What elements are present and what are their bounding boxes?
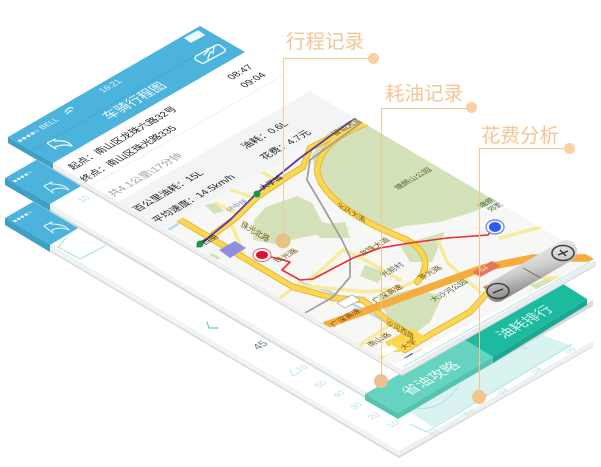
stats panel: 百公里油耗：15L [129, 168, 207, 214]
screen layer 2: speed chart [5, 67, 593, 429]
blue header of layer 3 [5, 192, 95, 245]
stats panel [118, 91, 355, 229]
road and place names: 珠光北路 [239, 219, 272, 244]
callout: fuel records: 耗油记录 [385, 83, 463, 105]
road and place names: 留仙大道 [328, 116, 364, 137]
y axis labels: 40 [330, 389, 347, 399]
back arrow layer 3 [44, 222, 69, 233]
callout: cost analysis [472, 125, 575, 404]
road and place names: 南山路 [364, 331, 393, 348]
header bar [8, 26, 245, 169]
map: 郊野公园 [484, 192, 520, 213]
map: 大沙河公园 [427, 278, 470, 303]
road and place names: 西丽 [199, 233, 221, 246]
road and place names [199, 116, 444, 351]
y axis labels: 20 [365, 411, 382, 421]
callout: cost analysis: 花费分析 [481, 125, 559, 147]
blue header of layer 2 [5, 152, 95, 204]
x axis labels [427, 346, 579, 437]
sheet base [8, 137, 596, 376]
end marker [486, 220, 504, 234]
X356 tag [337, 295, 360, 308]
back arrow icon [47, 139, 72, 149]
tab bar [365, 282, 587, 419]
route [263, 230, 492, 280]
x axis labels: 04 [529, 366, 545, 375]
screen layer 1: trip map [8, 26, 596, 376]
road and place names: 龙珠大道 [356, 236, 392, 257]
trip addresses: 09:04 [238, 71, 270, 90]
y axis labels: 10 [384, 419, 401, 429]
status: time: 16:21 [96, 78, 124, 94]
interchange [385, 328, 425, 352]
tab: fuel saving tips: 省油攻略 [398, 359, 464, 398]
stats panel: 花费：4.7元 [256, 128, 314, 162]
screen layer 3: fuel chart [5, 107, 593, 458]
tab: fuel ranking: 油耗排行 [493, 303, 558, 341]
stats panel: 平均速度：14.5km/h [148, 172, 238, 225]
railway [305, 122, 362, 313]
callout: fuel records [374, 83, 477, 388]
zoom control [487, 246, 574, 298]
x axis labels: 01 [427, 428, 443, 437]
chevron [207, 322, 218, 328]
trip summary: 共4.1公里\17分钟 [104, 151, 186, 199]
trip addresses: 08:47 [225, 63, 257, 82]
battery icon [185, 31, 204, 42]
dots layer 3: ●●●●○ [11, 210, 35, 224]
share icon [195, 45, 225, 63]
trip addresses: 终点：南山区珠光路335 [76, 123, 180, 184]
map logo [396, 349, 422, 363]
road and place names: 环中线 [224, 198, 250, 213]
scale bar [378, 345, 398, 356]
map [165, 116, 594, 366]
dial value: 45 [250, 339, 271, 352]
main yellow roads [177, 123, 490, 350]
y axis labels: 30 [347, 401, 364, 411]
y axis labels: 50 [312, 379, 329, 389]
trip addresses: 起点：南山区龙珠六路32号 [64, 104, 180, 172]
map: 塘朗山公园 [391, 166, 434, 191]
road and place names: 大学 [397, 338, 420, 351]
y axis labels [293, 363, 401, 429]
trip addresses [64, 63, 270, 184]
dots layer 2: ●●●●○ [11, 170, 35, 184]
map: G4 [479, 266, 491, 273]
road and place names: 大学城 [256, 174, 285, 191]
tab: fuel ranking [462, 282, 587, 363]
stats panel: 油耗：0.6L [237, 119, 292, 151]
callout: trip records [276, 31, 379, 248]
road and place names: 茶光路 [415, 264, 444, 281]
highway [326, 258, 592, 325]
map: 光前村 [377, 261, 406, 278]
road and place names: 珠光路 [271, 247, 300, 264]
start marker [253, 248, 271, 262]
x axis labels: 02 [461, 408, 477, 417]
callout: trip records: 行程记录 [286, 31, 364, 53]
status: carrier: ●●●●○ BELL [14, 116, 62, 144]
x axis labels: 05 [563, 346, 579, 355]
road and place names: 北环大道 [337, 199, 366, 225]
parks [203, 116, 560, 335]
river [165, 224, 392, 325]
minor roads [216, 172, 557, 362]
title: 车骑行程图 [98, 80, 170, 122]
road and place names: 广深高速 [327, 307, 363, 328]
y axis labels: 10 [293, 363, 310, 373]
G4 tag [472, 261, 501, 277]
status: wifi icon [65, 108, 73, 114]
teal value: 10 [75, 194, 92, 204]
x axis labels: 03 [495, 387, 511, 396]
road and place names: 广深高速 [369, 283, 405, 304]
purple block [219, 241, 246, 258]
chart area [410, 331, 572, 427]
map: 塘朗山 [475, 192, 504, 209]
road and place names: 沙河西路 [386, 316, 415, 342]
tab: fuel saving tips [365, 338, 493, 419]
rounded outline card [58, 238, 105, 259]
metro line [197, 118, 355, 247]
metro stations [254, 190, 260, 198]
back arrow layer 2 [44, 182, 69, 193]
